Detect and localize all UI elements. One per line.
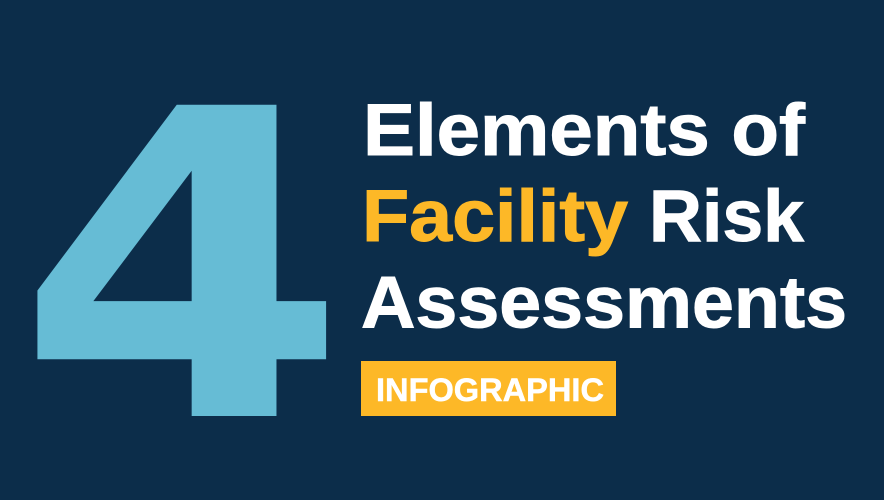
badge: INFOGRAPHIC: INFOGRAPHIC	[376, 372, 604, 408]
title line: Risk: Risk	[649, 176, 804, 257]
title line: Assessments: Assessments	[361, 262, 847, 344]
title line: Facility (highlighted): Facility	[362, 176, 628, 257]
badge: INFOGRAPHIC	[361, 361, 616, 416]
title	[361, 90, 847, 344]
title line: Elements of: Elements of	[363, 90, 806, 171]
